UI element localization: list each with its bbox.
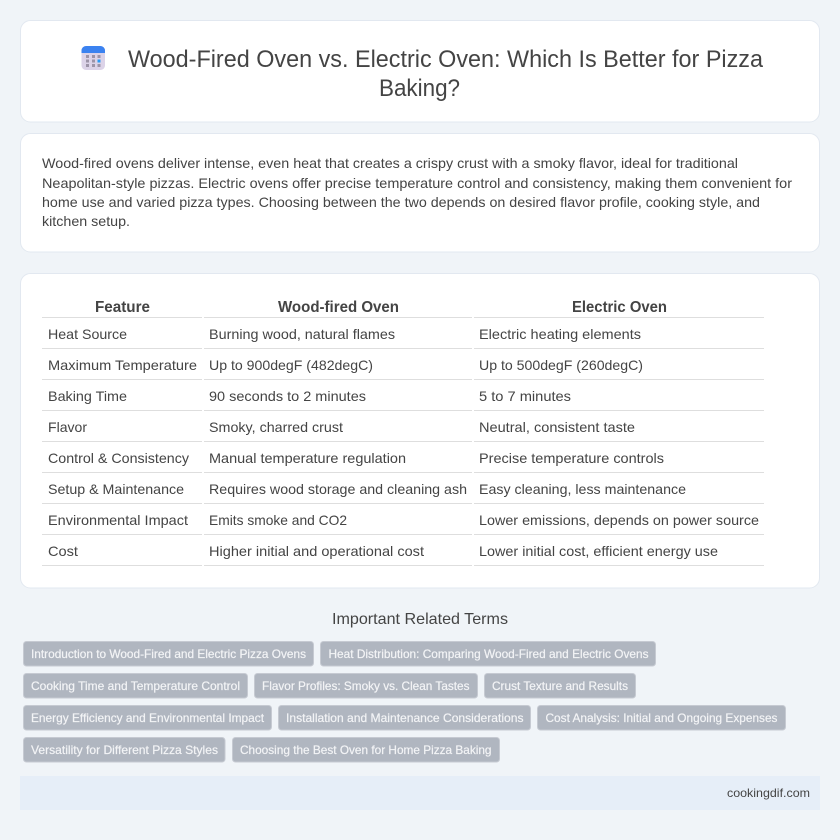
tag <box>24 642 314 666</box>
text block: description: Neapolitan-style pizzas. Electric ovens offer precise temperature control and consistency, making them convenient for <box>42 175 792 191</box>
footer: cookingdif.com <box>727 786 810 800</box>
row: cost: Cost <box>48 543 78 559</box>
row: flavor <box>48 419 635 435</box>
row: flavor: Neutral, consistent taste <box>479 419 635 435</box>
footer <box>20 776 820 810</box>
tag: Versatility for Different Pizza Styles <box>31 743 218 757</box>
row: baking time: 90 seconds to 2 minutes <box>209 388 366 404</box>
panel: header <box>20 20 820 122</box>
panel: comparison table <box>20 274 820 588</box>
tag <box>538 706 786 730</box>
text block: description: kitchen setup. <box>42 213 130 229</box>
tag: Energy Efficiency and Environmental Impact <box>31 711 265 725</box>
tag: Cost Analysis: Initial and Ongoing Expenses <box>546 711 778 725</box>
tag: Installation and Maintenance Considerations <box>286 711 524 725</box>
tag: Choosing the Best Oven for Home Pizza Baking <box>240 743 492 757</box>
row: baking time: 5 to 7 minutes <box>479 388 571 404</box>
table header: Wood-fired Oven <box>278 299 399 316</box>
row: maximum temperature: Up to 500degF (260degC) <box>479 357 643 373</box>
row: control and consistency: Precise temperature controls <box>479 450 664 466</box>
row: maximum temperature: Up to 900degF (482degC) <box>209 357 373 373</box>
row: setup and maintenance <box>48 481 686 497</box>
tag <box>24 706 272 730</box>
tag <box>278 706 530 730</box>
tags: related terms <box>24 642 786 762</box>
table header <box>95 299 667 316</box>
table header: Feature <box>95 299 150 316</box>
text block: description: Wood-fired ovens deliver intense, even heat that creates a crispy crust with a smoky flavor, ideal for traditional <box>42 155 738 171</box>
row: baking time <box>48 388 571 404</box>
row: cost: Higher initial and operational cost <box>209 543 424 559</box>
row: heat source: Burning wood, natural flames <box>209 326 395 342</box>
heading: related terms: Important Related Terms <box>332 611 508 628</box>
row: environmental impact: Environmental Impact <box>48 512 188 528</box>
row: flavor: Smoky, charred crust <box>209 419 343 435</box>
title <box>128 46 764 102</box>
icon: calendar <box>82 46 105 70</box>
row: maximum temperature: Maximum Temperature <box>48 357 197 373</box>
row: control and consistency: Control & Consistency <box>48 450 189 466</box>
tag <box>320 642 656 666</box>
row: environmental impact: Emits smoke and CO2 <box>209 512 347 528</box>
row: flavor: Flavor <box>48 419 87 435</box>
row: environmental impact: Lower emissions, depends on power source <box>479 512 759 528</box>
title: Wood-Fired Oven vs. Electric Oven: Which Is Better for Pizza <box>128 46 764 73</box>
text block: description: home use and varied pizza types. Choosing between the two depends on desired flavor profile, cooking style, and <box>42 194 760 210</box>
row: setup and maintenance: Easy cleaning, less maintenance <box>479 481 686 497</box>
tag <box>24 674 248 698</box>
row: cost <box>48 543 718 559</box>
row: setup and maintenance: Requires wood storage and cleaning ash <box>209 481 467 497</box>
tag <box>484 674 636 698</box>
row: heat source: Electric heating elements <box>479 326 641 342</box>
row: baking time: Baking Time <box>48 388 127 404</box>
tag <box>232 738 500 762</box>
tag: Flavor Profiles: Smoky vs. Clean Tastes <box>262 679 470 693</box>
row: maximum temperature <box>48 357 643 373</box>
row: heat source <box>48 326 641 342</box>
row: control and consistency: Manual temperature regulation <box>209 450 406 466</box>
row: control and consistency <box>48 450 664 466</box>
row: heat source: Heat Source <box>48 326 127 342</box>
tag: Introduction to Wood-Fired and Electric Pizza Ovens <box>31 647 306 661</box>
row: environmental impact <box>48 512 759 528</box>
tag: Heat Distribution: Comparing Wood-Fired and Electric Ovens <box>328 647 648 661</box>
tag <box>24 738 225 762</box>
row: cost: Lower initial cost, efficient energy use <box>479 543 718 559</box>
tag: Crust Texture and Results <box>492 679 628 693</box>
tag: Cooking Time and Temperature Control <box>31 679 240 693</box>
row: setup and maintenance: Setup & Maintenance <box>48 481 184 497</box>
table header: Electric Oven <box>572 299 667 316</box>
panel: description <box>20 134 820 252</box>
title: Baking? <box>379 75 460 102</box>
text block: description <box>42 155 792 229</box>
tag <box>254 674 478 698</box>
